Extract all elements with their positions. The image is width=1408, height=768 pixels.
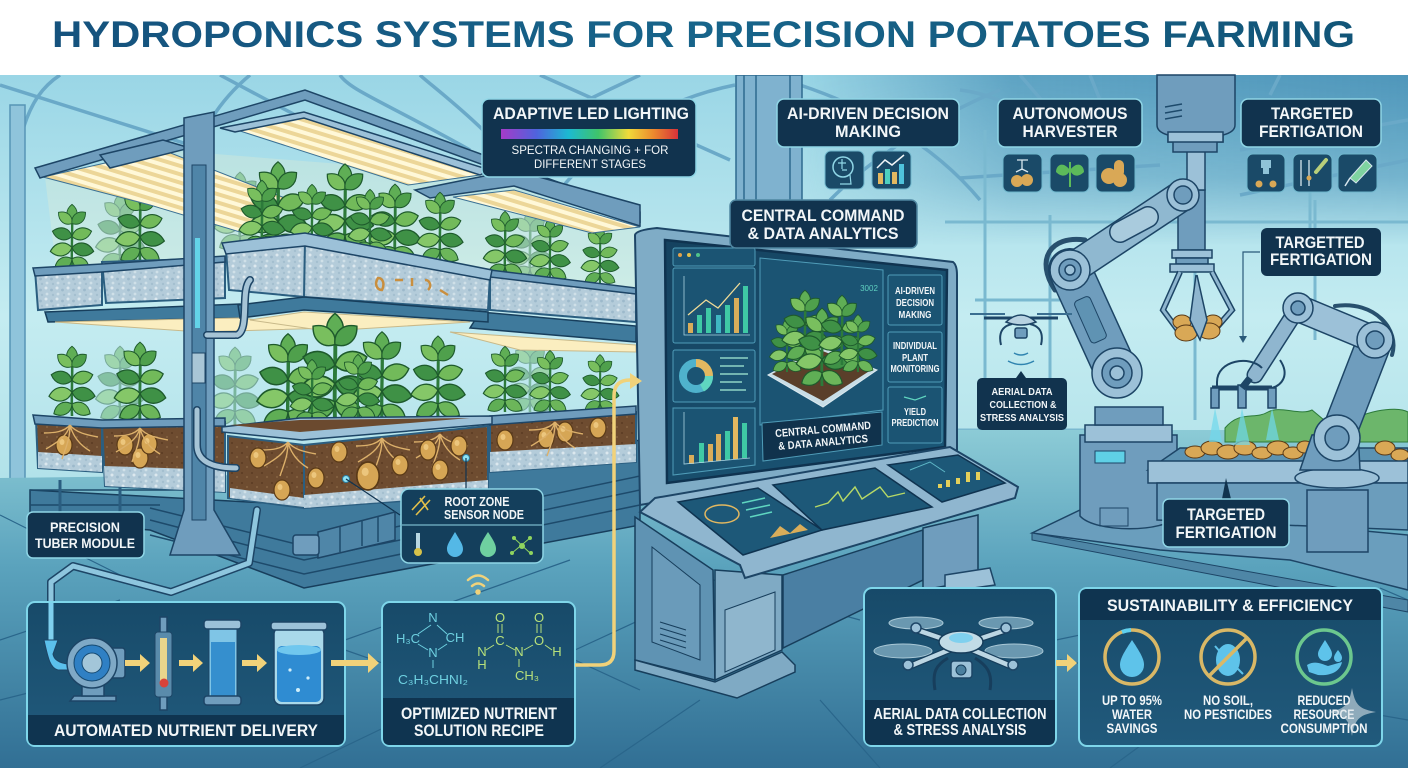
central command label (730, 200, 917, 248)
aerial data collection panel: AERIAL DATA COLLECTION (874, 706, 1046, 723)
icon: molecule (510, 536, 533, 555)
centre plant view (760, 258, 883, 425)
robot arm links (1046, 195, 1183, 373)
console screen (665, 240, 947, 483)
aerial data label (small) (977, 371, 1067, 430)
small drone (970, 314, 1072, 364)
chemical formula 2: H (552, 644, 562, 659)
screen panel: plant monitoring (888, 332, 942, 382)
adaptive LED lighting label: ADAPTIVE LED LIGHTING (493, 104, 689, 123)
icon: wifi signal (468, 576, 488, 594)
chemical formula 1: N (428, 610, 438, 625)
floor (0, 430, 1408, 768)
arrow: recipe to command console (575, 373, 642, 665)
optimized nutrient solution recipe panel: SOLUTION RECIPE (414, 721, 544, 740)
bar chart (673, 408, 755, 475)
optimized nutrient solution recipe panel (382, 602, 575, 746)
screen panel: AI-driven (888, 275, 942, 325)
chemical formula 2: N (514, 644, 524, 659)
arrow to sustainability panel (1056, 654, 1077, 672)
targeted fertigation label (bottom): FERTIGATION (1176, 523, 1276, 542)
targeted fertigation label (top) (1241, 99, 1381, 147)
precision tuber module label: TUBER MODULE (35, 535, 135, 551)
robot base (1080, 407, 1177, 529)
chemical formula 1 (396, 610, 468, 687)
root zone sensor node panel (401, 489, 543, 563)
fertigation robot arm (1209, 293, 1393, 552)
browser bar (673, 248, 755, 266)
icon: nutrient drop (480, 532, 496, 557)
sustainability and efficiency panel (1079, 588, 1382, 746)
desk screen: gauges (678, 488, 822, 555)
screen panel: AI-driven: MAKING (898, 310, 932, 321)
upper main plants (238, 162, 464, 265)
sustainability and efficiency panel: NO PESTICIDES (1184, 706, 1272, 722)
icon: no pesticides (1201, 630, 1255, 684)
icon: water drop (447, 532, 463, 557)
plumbing pipes (51, 280, 257, 605)
greenhouse background (0, 75, 1408, 515)
chemical formula 2: C (495, 633, 505, 648)
icon: water savings gauge (1105, 630, 1159, 684)
adaptive LED lighting label (482, 99, 696, 177)
base platform (30, 440, 640, 588)
gantry frame (35, 90, 640, 226)
icon: dropper lines (1293, 154, 1332, 192)
icon: inline thermometer (155, 617, 172, 710)
aerial data label (small): AERIAL DATA (992, 387, 1052, 398)
icon: potatoes (1096, 154, 1135, 192)
adaptive LED lighting label: DIFFERENT STAGES (534, 157, 646, 171)
screen panel: yield prediction: PREDICTION (892, 418, 938, 429)
autonomous harvester label: AUTONOMOUS (1012, 104, 1128, 123)
icon: filter cylinder (204, 620, 241, 705)
targeted fertigation label (bottom) (1163, 478, 1289, 547)
chemical formula 1: C₃H₃CHNI₂ (398, 672, 468, 687)
centre plant view: 3002 (860, 284, 878, 293)
screen panel: AI-driven: DECISION (896, 298, 934, 309)
targetted fertigation label: FERTIGATION (1270, 250, 1372, 269)
pipe arrow into pump (44, 603, 68, 670)
foliage (1225, 409, 1408, 442)
icon: sensor chip (412, 496, 430, 515)
horizontal pump cylinder (293, 512, 395, 558)
chemical formula 1: H₃C (396, 631, 420, 646)
screen panel: plant monitoring: MONITORING (890, 364, 940, 375)
aerial data label (small): COLLECTION & (990, 400, 1056, 411)
LED panels (43, 118, 640, 233)
screen housing (635, 228, 957, 505)
arrow: targetted fertigation pointer (1239, 252, 1260, 343)
targetted fertigation label: TARGETTED (1276, 233, 1364, 252)
adaptive LED lighting label: SPECTRA CHANGING + FOR (512, 143, 669, 157)
sparkle watermark (1328, 688, 1376, 736)
robot work platform (1032, 510, 1408, 612)
gripper with potatoes (1163, 272, 1232, 341)
icon: reduced resources (1297, 630, 1351, 684)
sustainability and efficiency panel: RESOURCE (1294, 706, 1354, 722)
central command label: CENTRAL COMMAND (742, 206, 904, 225)
donut chart (673, 350, 755, 402)
fertigation tray (1148, 409, 1408, 530)
optimized nutrient solution recipe panel: OPTIMIZED NUTRIENT (401, 704, 558, 723)
icon: thermometer (414, 533, 422, 556)
icon: seedling (1050, 154, 1089, 192)
back trays upper tier (33, 188, 636, 352)
console pedestal (635, 515, 995, 698)
second robot base (1295, 430, 1379, 552)
automated nutrient delivery panel (27, 602, 345, 746)
aerial data collection panel (864, 588, 1056, 746)
desk screen: line graph (773, 468, 932, 530)
icon: harvest gripper (1003, 154, 1042, 192)
second robot joints (1283, 293, 1393, 461)
icon: pump (67, 638, 125, 701)
harvesting robot arm (1046, 75, 1235, 529)
potatoes in tray (1185, 441, 1408, 461)
arrow to recipe panel (331, 653, 379, 673)
sustainability and efficiency panel: CONSUMPTION (1280, 720, 1368, 736)
screen panel: yield prediction: YIELD (904, 407, 926, 418)
hydroponic rack (30, 90, 640, 605)
sustainability and efficiency panel: SAVINGS (1106, 720, 1158, 736)
title: HYDROPONICS SYSTEMS FOR PRECISION POTATOES FARMING (52, 14, 1355, 55)
second robot arm links (1255, 305, 1393, 438)
chemical formula 2: CH₃ (515, 668, 539, 683)
faded foliage behind (94, 172, 554, 428)
lower main plants (255, 313, 466, 432)
aerial data collection panel: & STRESS ANALYSIS (894, 722, 1027, 739)
vertical column (1157, 75, 1235, 272)
root zone sensor node panel: SENSOR NODE (444, 507, 524, 522)
automated nutrient delivery panel: AUTOMATED NUTRIENT DELIVERY (54, 721, 319, 740)
sustainability and efficiency panel: WATER (1112, 706, 1152, 722)
upper main tray (222, 233, 492, 331)
autonomous harvester label (998, 99, 1142, 147)
robot joints (1050, 179, 1199, 398)
sustainability and efficiency panel: NO SOIL, (1203, 692, 1253, 708)
screen panel: yield prediction (888, 387, 942, 443)
icon: fertigation nozzle (1247, 154, 1285, 192)
targeted fertigation label (bottom): TARGETED (1187, 505, 1265, 524)
targetted fertigation label (1261, 228, 1381, 276)
precision tuber module label: PRECISION (50, 519, 120, 535)
spray nozzle bar (1209, 360, 1285, 445)
sustainability and efficiency panel: SUSTAINABILITY & EFFICIENCY (1107, 596, 1354, 615)
sustainability and efficiency panel: REDUCED (1298, 692, 1350, 708)
screen panel: plant monitoring: INDIVIDUAL (893, 341, 937, 352)
desk screen: bars (888, 455, 1005, 502)
chemical formula 2: O (534, 633, 544, 648)
back trays lower tier (33, 342, 636, 492)
lower main tray (222, 416, 492, 515)
chemical formula 2: O (534, 610, 544, 625)
spectrum bar (501, 129, 678, 139)
central post (170, 112, 240, 555)
aerial data label (small): STRESS ANALYSIS (980, 413, 1064, 424)
precision tuber module label (27, 512, 144, 558)
arrow (242, 654, 267, 672)
back light glow (45, 150, 640, 300)
screen panel: plant monitoring: PLANT (902, 353, 928, 364)
chemical formula 2 (477, 610, 562, 683)
icon: AI head (825, 151, 864, 189)
sustainability and efficiency panel: UP TO 95% (1102, 692, 1162, 708)
targeted fertigation label (top): TARGETED (1271, 104, 1353, 123)
title band (0, 0, 1408, 75)
icon: growth chart (872, 151, 911, 189)
icon: syringe (1338, 154, 1377, 192)
screen label: central command: CENTRAL COMMAND (775, 420, 871, 440)
autonomous harvester label: HARVESTER (1022, 122, 1118, 141)
desk surface (640, 447, 1018, 578)
line and bar chart (673, 268, 755, 343)
screen label: central command: & DATA ANALYTICS (778, 433, 868, 453)
icon: quadcopter drone (874, 617, 1043, 690)
screen label: central command (762, 412, 882, 461)
AI-driven decision making label (777, 99, 959, 147)
screen panel: AI-driven: AI-DRIVEN (895, 286, 935, 297)
arrow (125, 654, 150, 672)
central command label: & DATA ANALYTICS (748, 224, 898, 243)
chemical formula 1: N (428, 645, 438, 660)
command console (635, 228, 1018, 698)
AI-driven decision making label: MAKING (835, 122, 901, 141)
chemical formula 2: O (495, 610, 505, 625)
root zone sensor node panel: ROOT ZONE (444, 494, 510, 509)
chemical formula 2: N (477, 644, 487, 659)
chemical formula 1: CH (446, 630, 464, 645)
AI-driven decision making label: AI-DRIVEN DECISION (787, 104, 949, 123)
targeted fertigation label (top): FERTIGATION (1259, 122, 1363, 141)
arrow (179, 654, 203, 672)
chemical formula 2: H (477, 657, 487, 672)
icon: nutrient beaker (271, 622, 327, 705)
